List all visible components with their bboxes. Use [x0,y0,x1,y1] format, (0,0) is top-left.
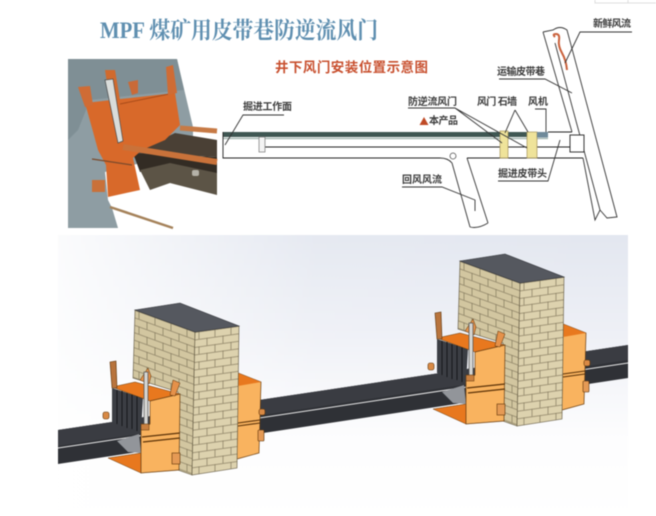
label: door stone wall [477,95,528,133]
label: working face: 掘进工作面 [243,100,292,113]
label: return air [402,173,475,211]
page corner frame [595,0,656,3]
label: anti-backflow door: 防逆流风门 [408,95,457,108]
label: transport belt roadway: 运输皮带巷 [497,65,545,78]
subtitle: 井下风门安装位置示意图 [275,59,428,75]
panel background [58,235,628,516]
label: working face [225,100,292,145]
roadway and belt lines [223,132,583,158]
label: this product [420,114,458,127]
label: fan: 风机 [528,95,548,108]
installation diagram [223,17,632,228]
label: fresh air [565,17,632,63]
label: fan [528,95,548,132]
transport belt roadway [543,28,617,220]
label: this product: 本产品 [429,114,458,127]
label: door stone wall: 风门 石墙 [477,95,517,108]
label: fresh air: 新鲜风流 [593,17,631,30]
label: anti-backflow door [408,95,527,148]
label: belt head: 掘进皮带头 [498,167,547,180]
3D model panel [58,235,628,516]
icon: fresh air squiggle [554,34,567,70]
label: belt head [498,140,560,181]
belt head box [570,135,584,152]
conveyor belt [58,345,628,464]
label: return air: 回风风流 [402,173,442,186]
fan [537,132,548,138]
label: transport belt roadway [497,65,572,93]
photo: installed air door [68,59,217,228]
air door unit with brick wall: right [428,254,590,426]
air door stone walls [500,131,537,158]
air door unit with brick wall: left [103,303,265,475]
return air roadway [440,158,488,228]
title: MPF 煤矿用皮带巷防逆流风门 [100,18,378,43]
